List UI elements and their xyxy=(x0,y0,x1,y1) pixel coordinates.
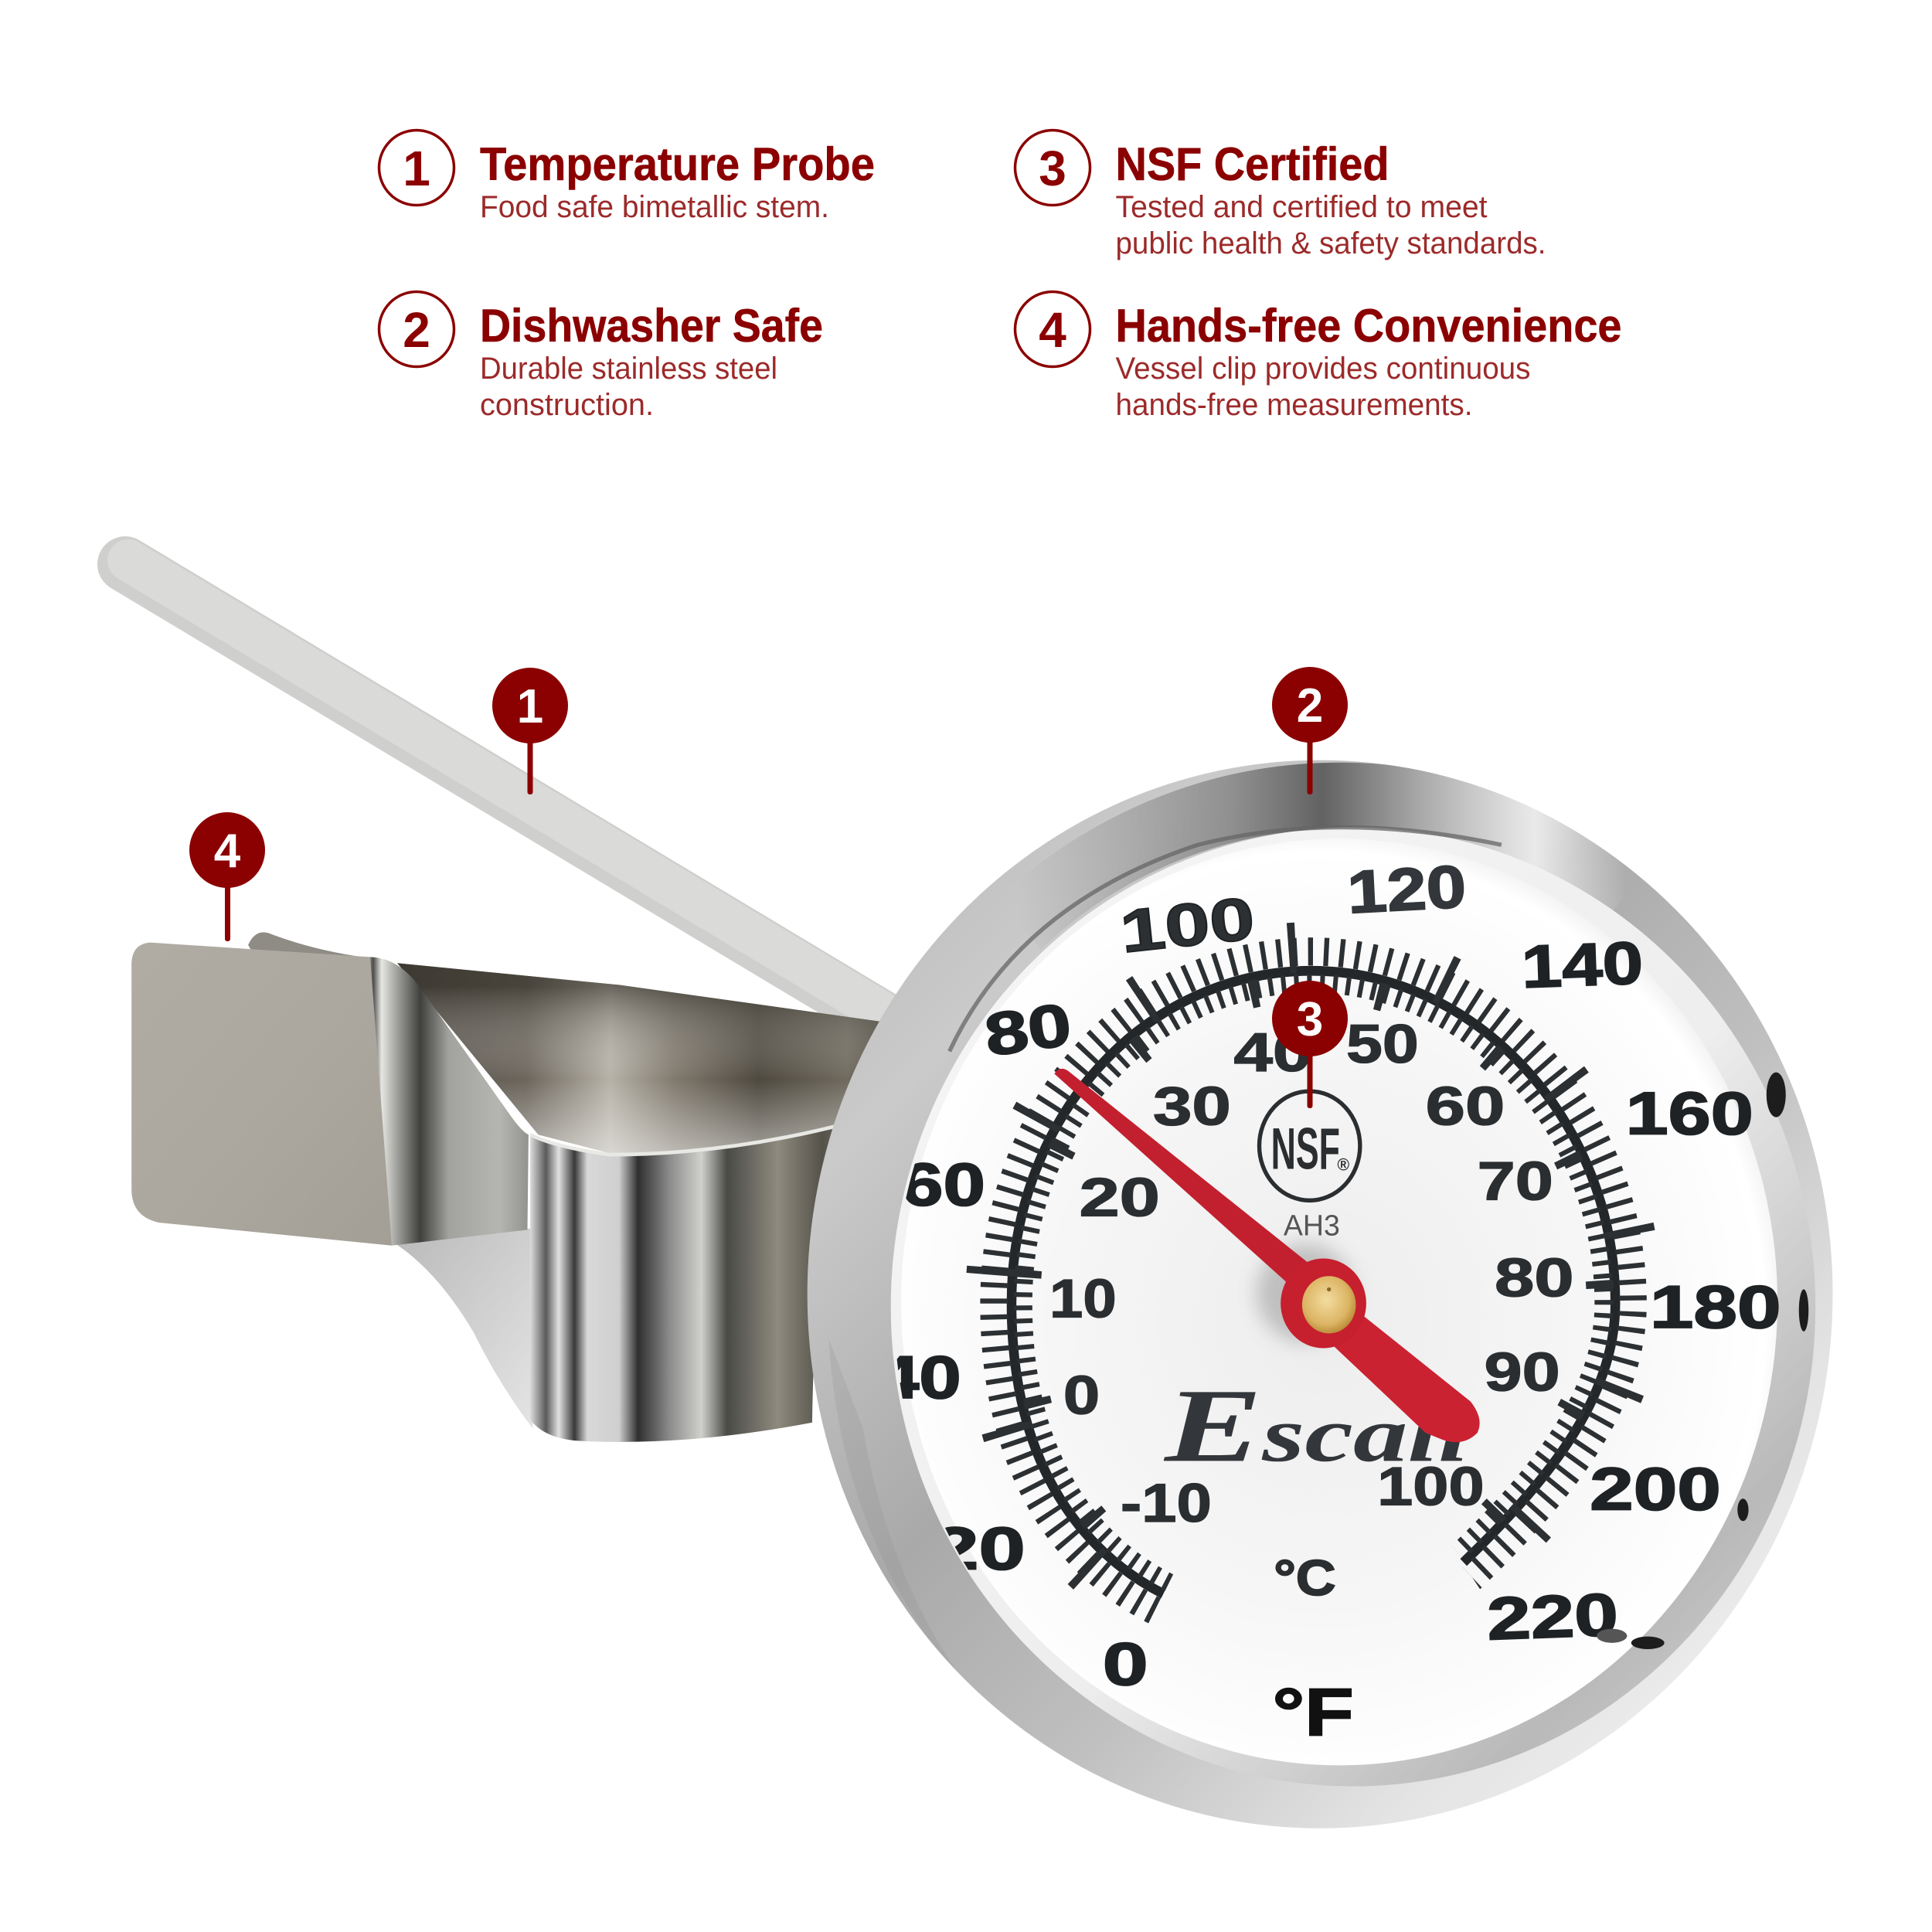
celsius labels: 90 xyxy=(1485,1341,1560,1403)
fahrenheit major ticks xyxy=(991,947,1637,1614)
vessel clip xyxy=(131,932,896,1442)
probe stem xyxy=(125,560,903,1029)
celsius labels: 10 xyxy=(1049,1267,1117,1329)
clip front curve xyxy=(530,1123,850,1442)
clip lower reflection xyxy=(391,1229,533,1429)
callout 4: clip: 4 xyxy=(214,825,241,878)
fahrenheit labels: 20 xyxy=(932,1515,1026,1583)
NSF logo: NSF xyxy=(1271,1117,1340,1182)
bezel xyxy=(808,760,1832,1828)
fahrenheit labels: 220 xyxy=(1486,1581,1619,1653)
fahrenheit labels xyxy=(877,853,1781,1698)
callout 3: NSF mark xyxy=(1272,981,1348,1108)
celsius labels: 50 xyxy=(1346,1012,1419,1074)
unit label: fahrenheit: °F xyxy=(1272,1675,1354,1750)
celsius labels xyxy=(1049,1012,1574,1533)
fahrenheit labels: 80 xyxy=(981,991,1076,1070)
glass ring xyxy=(891,828,1815,1787)
NSF logo xyxy=(1259,1091,1360,1200)
legend item 3: NSF certified: 3 xyxy=(1039,141,1066,196)
celsius labels: 60 xyxy=(1426,1075,1505,1137)
legend item 3: NSF certified xyxy=(1015,130,1546,260)
celsius labels: 30 xyxy=(1153,1075,1231,1137)
reflection specks xyxy=(1597,1073,1808,1649)
unit label: celsius: °C xyxy=(1274,1549,1336,1606)
model number: AH3 xyxy=(1284,1209,1340,1243)
callout 2: case xyxy=(1272,667,1348,794)
legend item 1: temperature probe: Temperature Probe xyxy=(480,138,875,190)
legend item 1: temperature probe xyxy=(379,130,875,224)
callout 1: probe xyxy=(492,668,568,794)
legend item 4: hands-free convenience xyxy=(1015,292,1621,422)
callout 4: clip xyxy=(189,812,265,941)
legend item 1: temperature probe: 1 xyxy=(403,141,430,196)
main arc xyxy=(1012,971,1615,1594)
fahrenheit labels: 40 xyxy=(877,1344,961,1411)
clip back wall xyxy=(397,963,896,1156)
legend item 3: NSF certified: Tested and certified to meet xyxy=(1116,190,1487,224)
celsius labels: 20 xyxy=(1079,1166,1160,1227)
celsius minor ticks xyxy=(1023,984,1604,1583)
legend item 2: dishwasher safe xyxy=(379,292,823,422)
celsius labels: 100 xyxy=(1377,1455,1485,1517)
clip flat plate xyxy=(131,943,392,1246)
legend item 4: hands-free convenience: hands-free measurements. xyxy=(1116,388,1473,422)
legend item 4: hands-free convenience: 4 xyxy=(1039,302,1066,358)
callout 2: case: 2 xyxy=(1297,679,1323,733)
NSF logo: ® xyxy=(1337,1155,1349,1174)
needle xyxy=(1054,1069,1480,1442)
callout 1: probe: 1 xyxy=(517,680,543,733)
fahrenheit labels: 140 xyxy=(1520,930,1644,1001)
fahrenheit labels: 200 xyxy=(1590,1456,1721,1523)
fahrenheit labels: 160 xyxy=(1626,1080,1753,1147)
fahrenheit labels: 180 xyxy=(1650,1274,1781,1341)
panel: feature legend xyxy=(379,130,1621,422)
dial scale arcs xyxy=(991,947,1637,1614)
legend item 3: NSF certified: NSF Certified xyxy=(1116,138,1389,190)
legend item 2: dishwasher safe: Dishwasher Safe xyxy=(480,300,823,352)
celsius major ticks xyxy=(1026,988,1600,1580)
legend item 2: dishwasher safe: Durable stainless steel xyxy=(480,352,777,386)
legend item 2: dishwasher safe: construction. xyxy=(480,388,654,422)
celsius labels: 40 xyxy=(1233,1021,1311,1083)
fahrenheit labels: 0 xyxy=(1103,1631,1148,1698)
clip back strip xyxy=(248,932,381,968)
fahrenheit minor ticks xyxy=(994,951,1633,1611)
legend item 4: hands-free convenience: Hands-free Convenience xyxy=(1116,300,1621,352)
legend item 4: hands-free convenience: Vessel clip provides continuous xyxy=(1116,352,1530,386)
legend item 1: temperature probe: Food safe bimetallic stem. xyxy=(480,190,829,224)
celsius labels: -10 xyxy=(1121,1472,1212,1533)
thermometer gauge xyxy=(808,760,1832,1828)
dial face xyxy=(901,838,1777,1765)
celsius labels: 0 xyxy=(1063,1364,1100,1426)
needle hub xyxy=(1281,1259,1366,1348)
legend item 3: NSF certified: public health & safety standards. xyxy=(1116,226,1546,260)
brand name: E scali xyxy=(1164,1368,1468,1485)
callout 3: NSF mark: 3 xyxy=(1297,993,1323,1046)
celsius labels: 80 xyxy=(1495,1247,1574,1308)
brass pivot xyxy=(1302,1276,1355,1333)
legend item 2: dishwasher safe: 2 xyxy=(403,302,430,358)
clip bend xyxy=(369,957,529,1246)
fahrenheit labels: 100 xyxy=(1117,885,1258,966)
fahrenheit labels: 120 xyxy=(1345,853,1468,927)
celsius labels: 70 xyxy=(1478,1150,1553,1212)
fahrenheit labels: 60 xyxy=(901,1151,985,1219)
